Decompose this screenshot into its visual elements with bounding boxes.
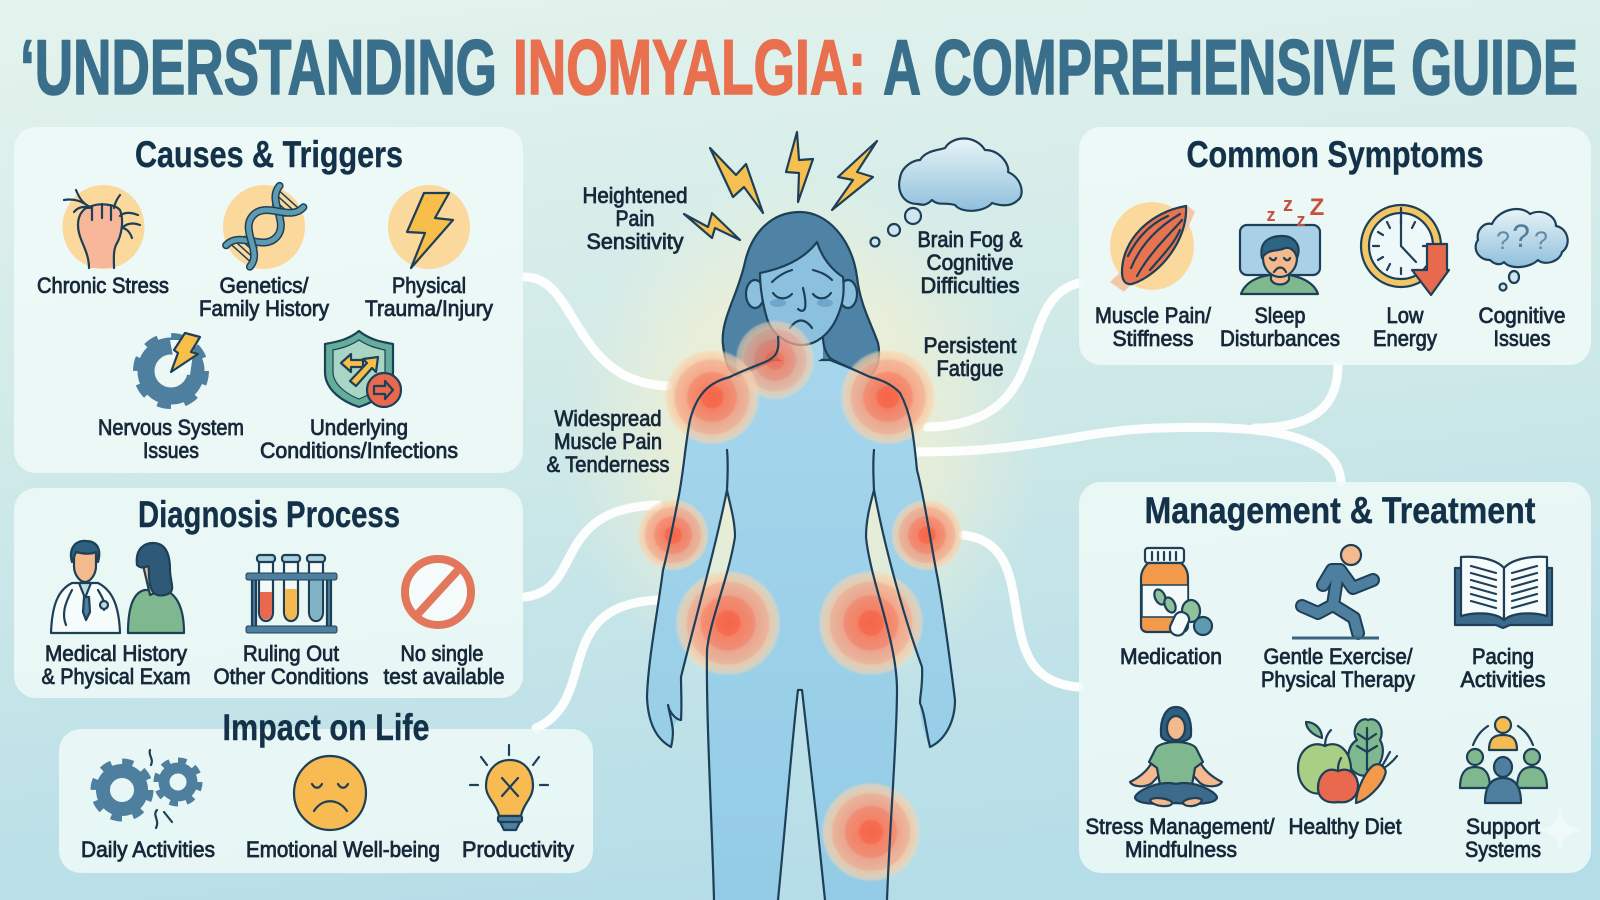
icon: brain fog cloud bbox=[870, 138, 1022, 246]
label: underlying conditions: Conditions/Infections bbox=[260, 438, 458, 463]
body fill bbox=[647, 337, 955, 900]
label: low energy: Energy bbox=[1373, 326, 1437, 351]
label: gentle exercise: Gentle Exercise/ bbox=[1264, 644, 1413, 669]
heading: management and treatment: Management & Treatment bbox=[1144, 490, 1536, 531]
panel: common symptoms bbox=[1079, 127, 1591, 365]
label: brain fog: Cognitive bbox=[926, 250, 1014, 275]
panel: impact on life bbox=[59, 707, 593, 873]
icon: doctor and patient bbox=[51, 541, 184, 633]
hotspot: left shoulder bbox=[664, 349, 760, 445]
label: no single test bbox=[384, 641, 504, 689]
label: pacing activities: Pacing bbox=[1472, 644, 1534, 669]
label: sleep disturbances: Sleep bbox=[1254, 303, 1306, 328]
central warm glow bbox=[560, 170, 1040, 710]
label: daily activities: Daily Activities bbox=[81, 837, 215, 862]
label: medical history: & Physical Exam bbox=[42, 664, 190, 689]
label: emotional well-being: Emotional Well-being bbox=[246, 837, 440, 862]
hotspot: left hip bbox=[675, 570, 781, 676]
hotspot: right elbow bbox=[891, 499, 963, 571]
panel: diagnosis process bbox=[14, 488, 523, 698]
label: widespread muscle pain: Muscle Pain bbox=[554, 429, 662, 454]
label: chronic stress: Chronic Stress bbox=[37, 273, 169, 298]
icon: sad face bbox=[294, 756, 366, 830]
hotspot: left elbow bbox=[637, 499, 709, 571]
label: medication: Medication bbox=[1120, 644, 1222, 669]
faint sparkle bbox=[1538, 806, 1582, 854]
sleep z letters: z bbox=[1266, 205, 1276, 225]
icon: shield bbox=[325, 331, 401, 407]
facial features bbox=[770, 270, 833, 328]
label: support systems bbox=[1465, 814, 1541, 862]
label: persistent fatigue: Persistent bbox=[924, 333, 1016, 358]
title: INOMYALGIA: bbox=[513, 23, 866, 111]
label: genetics: Genetics/ bbox=[220, 273, 309, 298]
ear right bbox=[839, 280, 857, 308]
heading: diagnosis process: Diagnosis Process bbox=[138, 494, 400, 535]
label: ruling out: Ruling Out bbox=[243, 641, 339, 666]
label: productivity: Productivity bbox=[462, 837, 574, 862]
label: muscle pain bbox=[1095, 303, 1212, 351]
label: widespread muscle pain: Widespread bbox=[554, 406, 662, 431]
icon: chronic stress hand bbox=[62, 185, 144, 269]
icon: running person bbox=[1292, 545, 1379, 638]
label: stress management: Mindfulness bbox=[1125, 837, 1237, 862]
hotspot: neck bbox=[735, 320, 815, 400]
body outline bbox=[647, 337, 955, 900]
icon: question cloud bbox=[1476, 209, 1568, 290]
label: support systems: Support bbox=[1466, 814, 1540, 839]
label: brain fog: Brain Fog & bbox=[918, 227, 1023, 252]
label: ruling out bbox=[214, 641, 368, 689]
icon: meditation bbox=[1130, 707, 1222, 806]
label: cognitive issues: Issues bbox=[1494, 326, 1550, 351]
label: heightened pain sensitivity: Sensitivity bbox=[586, 229, 684, 254]
label: widespread muscle pain bbox=[546, 406, 670, 477]
connector lines bbox=[525, 277, 1341, 728]
label: pacing activities bbox=[1460, 644, 1546, 692]
sleep z letters: z bbox=[1296, 210, 1306, 230]
icon: broken gears bbox=[95, 750, 199, 828]
hotspot: right hip bbox=[818, 570, 924, 676]
label: muscle pain: Stiffness bbox=[1112, 326, 1194, 351]
label: support systems: Systems bbox=[1465, 837, 1541, 862]
icon: lightning trauma bbox=[388, 185, 470, 269]
icon: book bbox=[1455, 557, 1552, 628]
icon: question cloud: ? bbox=[1512, 218, 1530, 254]
label: pacing activities: Activities bbox=[1460, 667, 1546, 692]
icon: test tubes bbox=[246, 555, 337, 633]
label: widespread muscle pain: & Tenderness bbox=[546, 452, 670, 477]
label: heightened pain sensitivity: Pain bbox=[616, 206, 654, 231]
ear left bbox=[746, 280, 764, 308]
label: underlying conditions bbox=[260, 415, 458, 463]
icon: muscle bbox=[1110, 202, 1195, 292]
icon: question cloud: ? bbox=[1534, 227, 1548, 255]
icon: sleep bbox=[1240, 194, 1324, 294]
label: gentle exercise: Physical Therapy bbox=[1261, 667, 1415, 692]
label: stress management bbox=[1086, 814, 1275, 862]
icon: dim lightbulb bbox=[470, 745, 548, 830]
icon: clock with down arrow bbox=[1361, 205, 1449, 295]
label: gentle exercise bbox=[1261, 644, 1415, 692]
title: ‘UNDERSTANDING bbox=[20, 23, 497, 111]
icon: support group bbox=[1460, 717, 1547, 803]
label: physical trauma bbox=[365, 273, 493, 321]
icon: lightning bolts around head bbox=[684, 132, 877, 240]
sleep z letters bbox=[1266, 194, 1324, 230]
label: genetics: Family History bbox=[199, 296, 329, 321]
panel: management and treatment bbox=[1079, 482, 1591, 873]
label: low energy bbox=[1373, 303, 1437, 351]
label: physical trauma: Physical bbox=[392, 273, 466, 298]
label: nervous system: Nervous System bbox=[98, 415, 244, 440]
label: muscle pain: Muscle Pain/ bbox=[1095, 303, 1212, 328]
heading: causes and triggers: Causes & Triggers bbox=[135, 134, 403, 175]
label: low energy: Low bbox=[1386, 303, 1424, 328]
icon: question cloud: ? bbox=[1496, 227, 1510, 255]
icon: medication bbox=[1141, 548, 1212, 638]
label: heightened pain sensitivity: Heightened bbox=[582, 183, 688, 208]
label: ruling out: Other Conditions bbox=[214, 664, 368, 689]
neck bbox=[778, 330, 823, 372]
label: heightened pain sensitivity bbox=[582, 183, 688, 254]
sleep z letters: z bbox=[1283, 194, 1293, 216]
hair bbox=[723, 212, 879, 376]
label: nervous system: Issues bbox=[143, 438, 199, 463]
label: medical history bbox=[42, 641, 190, 689]
label: no single test: test available bbox=[384, 664, 504, 689]
label: genetics bbox=[199, 273, 329, 321]
label: persistent fatigue: Fatigue bbox=[936, 356, 1004, 381]
label: sleep disturbances: Disturbances bbox=[1220, 326, 1340, 351]
label: underlying conditions: Underlying bbox=[310, 415, 408, 440]
label: nervous system bbox=[98, 415, 244, 463]
label: no single test: No single bbox=[400, 641, 484, 666]
heading: common symptoms: Common Symptoms bbox=[1186, 134, 1484, 175]
label: sleep disturbances bbox=[1220, 303, 1340, 351]
label: cognitive issues bbox=[1478, 303, 1566, 351]
label: brain fog bbox=[918, 227, 1023, 298]
label: physical trauma: Trauma/Injury bbox=[365, 296, 493, 321]
hotspot: right shoulder bbox=[840, 349, 936, 445]
title bbox=[20, 23, 1578, 111]
label: cognitive issues: Cognitive bbox=[1478, 303, 1566, 328]
icon: dna bbox=[223, 185, 305, 269]
label: healthy diet: Healthy Diet bbox=[1288, 814, 1402, 839]
label: brain fog: Difficulties bbox=[920, 273, 1020, 298]
icon: broken gear bbox=[138, 333, 204, 404]
label: medical history: Medical History bbox=[45, 641, 187, 666]
panel: causes and triggers bbox=[14, 127, 523, 473]
face bbox=[760, 242, 844, 345]
heading: impact on life: Impact on Life bbox=[222, 707, 430, 748]
sleep z letters: Z bbox=[1310, 194, 1324, 221]
label: stress management: Stress Management/ bbox=[1086, 814, 1275, 839]
hotspot: right knee bbox=[821, 782, 921, 882]
central figure bbox=[637, 212, 963, 900]
label: persistent fatigue bbox=[924, 333, 1016, 381]
icon: no test sign bbox=[405, 559, 471, 625]
icon: healthy food bbox=[1298, 719, 1397, 803]
